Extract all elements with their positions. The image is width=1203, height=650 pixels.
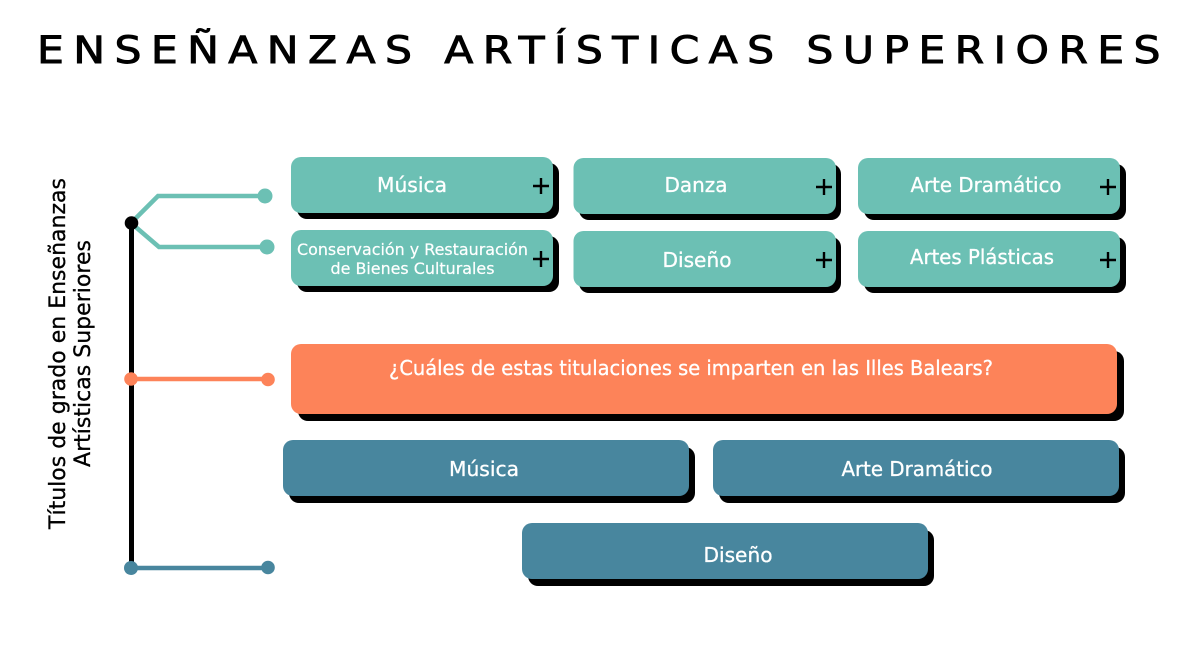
title: ENSEÑANZAS ARTÍSTICAS SUPERIORES [37, 29, 1161, 72]
button: Arte Dramático [858, 158, 1126, 220]
button: Música: Música [377, 173, 447, 197]
button: Conservación y Restauración: de Bienes Culturales [330, 259, 494, 278]
vertical axis label: Artísticas Superiores [71, 240, 96, 467]
question banner: ¿Cuáles de estas titulaciones se imparten en las Illes Balears? [389, 356, 993, 380]
button: Música [291, 157, 559, 219]
result: Arte Dramático [713, 440, 1125, 503]
button: Conservación y Restauración [291, 230, 559, 292]
result: Arte Dramático: Arte Dramático [842, 457, 992, 481]
result: Música [283, 440, 695, 503]
button: Diseño [574, 231, 841, 293]
question banner [291, 344, 1124, 421]
result: Música: Música [449, 457, 519, 481]
result: Diseño [522, 523, 934, 586]
button: Danza [574, 158, 841, 220]
result: Diseño: Diseño [704, 543, 772, 567]
button: Artes Plásticas: Artes Plásticas [910, 245, 1054, 269]
timeline connector [124, 188, 275, 575]
button: Diseño: Diseño [662, 248, 732, 272]
button: Danza: Danza [664, 173, 728, 197]
button: Conservación y Restauración: Conservación y Restauración [297, 240, 528, 259]
vertical axis label [46, 178, 96, 530]
button: Arte Dramático: Arte Dramático [910, 173, 1062, 197]
vertical axis label: Títulos de grado en Enseñanzas [46, 178, 71, 530]
button: Artes Plásticas [858, 231, 1126, 293]
